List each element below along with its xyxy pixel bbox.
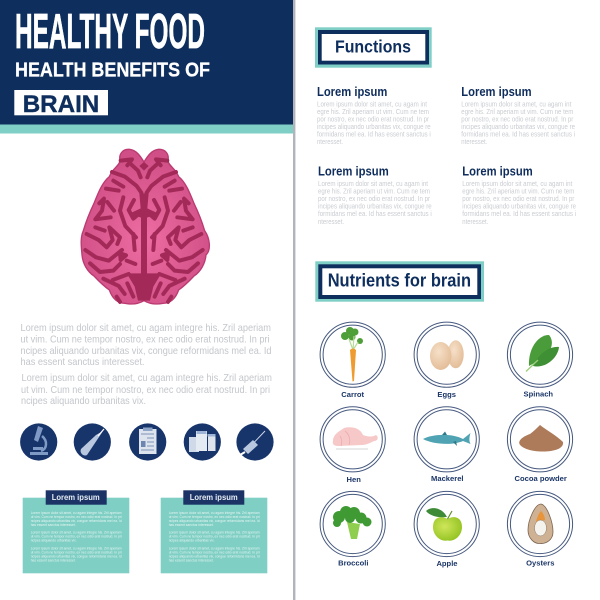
function block 2: Lorem ipsum dolor sit amet, cu agam int bbox=[461, 100, 571, 108]
card 1 text: ncipes aliquando urbanitas vix, congue reformidans mel ea. Id bbox=[31, 518, 122, 523]
function block 1: por nostro, ex nec odio erat nostrud. In pr bbox=[317, 114, 429, 124]
paragraph 1: ncipes aliquando urbanitas vix, congue reformidans mel ea. Id bbox=[20, 345, 272, 357]
function block 1: egre his. Zril aperiam ut vim. Cum ne tem bbox=[317, 107, 429, 116]
function block 4: por nostro, ex nec odio erat nostrud. In pr bbox=[462, 194, 575, 203]
notch bbox=[139, 162, 149, 171]
card 2 text: ncipes aliquando urbanitas vix, congue reformidans mel ea. Id bbox=[169, 554, 260, 559]
heading: functions: Functions bbox=[335, 37, 411, 57]
function block 2: por nostro, ex nec odio erat nostrud. In pr bbox=[461, 114, 574, 124]
right sulci bbox=[147, 159, 203, 302]
card 1 text: ut vim. Cum ne tempor nostro, ex nec odio erat nostrud. In pri bbox=[31, 550, 122, 555]
card 2 text: ut vim. Cum ne tempor nostro, ex nec odio erat nostrud. In pri bbox=[169, 533, 260, 538]
function block 4: egre his. Zril aperiam ut vim. Cum ne tem bbox=[462, 187, 574, 196]
function block 4: Lorem ipsum dolor sit amet, cu agam int bbox=[462, 179, 572, 188]
nutrient: broccoli bbox=[320, 491, 385, 567]
nutrient: apple bbox=[414, 491, 479, 568]
card 1 text: ncipes aliquando urbanitas vix. bbox=[31, 537, 77, 542]
function block 2 bbox=[461, 84, 575, 146]
function block 3: formidans mel ea. Id has essent sanctus i bbox=[318, 209, 432, 218]
card 2 text: ncipes aliquando urbanitas vix. bbox=[169, 537, 215, 542]
paragraph 1 bbox=[20, 322, 272, 368]
card 2 header: Lorem ipsum bbox=[190, 493, 238, 502]
card 1 header: Lorem ipsum bbox=[52, 493, 100, 502]
nutrient: apple: Apple bbox=[436, 559, 458, 568]
subtitle: HEALTH BENEFITS OF bbox=[15, 60, 210, 82]
card 1 text: Lorem ipsum dolor sit amet, cu agam integre his. Zril aperiam bbox=[31, 546, 122, 551]
central cross bbox=[129, 193, 159, 223]
card 2 text bbox=[169, 510, 260, 563]
card 1 text: Lorem ipsum dolor sit amet, cu agam integre his. Zril aperiam bbox=[31, 510, 122, 515]
function block 3: Lorem ipsum bbox=[318, 164, 389, 179]
card 2 text: Lorem ipsum dolor sit amet, cu agam integre his. Zril aperiam bbox=[169, 510, 260, 515]
function block 4: incipes aliquando urbanitas vix, congue re bbox=[462, 202, 576, 211]
function block 4: formidans mel ea. Id has essent sanctus i bbox=[462, 209, 576, 218]
card 1 text: Lorem ipsum dolor sit amet, cu agam integre his. Zril aperiam bbox=[31, 529, 122, 534]
card 2 bbox=[161, 490, 267, 573]
icon: syringe bbox=[236, 423, 274, 461]
nutrient: hen: Hen bbox=[347, 475, 361, 484]
brain label: BRAIN bbox=[23, 91, 99, 118]
heading: nutrients for brain bbox=[315, 261, 484, 302]
icon: thermometer bbox=[74, 423, 111, 461]
function block 3: incipes aliquando urbanitas vix, congue re bbox=[318, 202, 432, 211]
card 1 bbox=[23, 490, 129, 573]
card 1 text: has essent sanctus interesset. bbox=[31, 558, 76, 563]
card 2 text: ut vim. Cum ne tempor nostro, ex nec odio erat nostrud. In pri bbox=[169, 514, 260, 519]
paragraph 2: ut vim. Cum ne tempor nostro, ex nec odio erat nostrud. In pri bbox=[21, 384, 270, 396]
function block 3: nteresset. bbox=[318, 217, 344, 226]
nutrient: eggs bbox=[414, 322, 479, 399]
nutrient: spinach bbox=[507, 322, 573, 398]
header banner: HEALTHY FOOD bbox=[15, 5, 205, 59]
nutrient: oysters bbox=[507, 491, 573, 568]
panel divider bbox=[293, 0, 295, 600]
nutrient: cocoa powder: Cocoa powder bbox=[515, 474, 567, 483]
card 1 text bbox=[31, 510, 122, 563]
function block 2: incipes aliquando urbanitas vix, congue re bbox=[461, 122, 575, 131]
card 2 text: ncipes aliquando urbanitas vix, congue reformidans mel ea. Id bbox=[169, 518, 260, 523]
icon: microscope bbox=[20, 423, 57, 461]
header banner bbox=[0, 0, 293, 134]
function block 1 bbox=[317, 84, 431, 146]
function block 1: incipes aliquando urbanitas vix, congue re bbox=[317, 122, 431, 131]
card 2 text: has essent sanctus interesset. bbox=[169, 522, 214, 527]
nutrient: spinach: Spinach bbox=[524, 389, 553, 398]
nutrient: mackerel bbox=[414, 407, 479, 483]
nutrient: mackerel: Mackerel bbox=[431, 474, 464, 483]
nutrient: carrot: Carrot bbox=[341, 390, 365, 399]
card 2 text: has essent sanctus interesset. bbox=[169, 558, 214, 563]
heading: nutrients for brain: Nutrients for brain bbox=[328, 271, 471, 291]
function block 1: Lorem ipsum bbox=[317, 84, 387, 99]
function block 1: Lorem ipsum dolor sit amet, cu agam int bbox=[317, 100, 427, 108]
card 2 text: ut vim. Cum ne tempor nostro, ex nec odio erat nostrud. In pri bbox=[169, 550, 260, 555]
left sulci bbox=[85, 159, 141, 302]
function block 4 bbox=[462, 164, 576, 226]
nutrient: hen bbox=[320, 407, 385, 484]
paragraph 2: Lorem ipsum dolor sit amet, cu agam integre his. Zril aperiam bbox=[22, 372, 272, 384]
brain illustration bbox=[81, 149, 209, 304]
heading: functions bbox=[315, 27, 432, 68]
card 1 text: ncipes aliquando urbanitas vix, congue reformidans mel ea. Id bbox=[31, 554, 122, 559]
function block 1: formidans mel ea. Id has essent sanctus i bbox=[317, 130, 431, 138]
function block 3: por nostro, ex nec odio erat nostrud. In pr bbox=[318, 194, 430, 203]
function block 3: egre his. Zril aperiam ut vim. Cum ne tem bbox=[318, 187, 430, 196]
card 1 text: ut vim. Cum ne tempor nostro, ex nec odio erat nostrud. In pri bbox=[31, 533, 122, 538]
lower fissure bbox=[127, 273, 161, 301]
paragraph 1: Lorem ipsum dolor sit amet, cu agam integre his. Zril aperiam bbox=[20, 322, 271, 334]
nutrient: carrot bbox=[320, 322, 385, 399]
nutrient: oysters: Oysters bbox=[526, 558, 554, 568]
icon: medicine bottles bbox=[184, 423, 221, 461]
nutrient: eggs: Eggs bbox=[437, 390, 456, 399]
central fissure bbox=[135, 197, 153, 297]
function block 1: nteresset. bbox=[317, 137, 343, 146]
function block 2: nteresset. bbox=[461, 137, 487, 146]
card 2 text: Lorem ipsum dolor sit amet, cu agam integre his. Zril aperiam bbox=[169, 546, 260, 551]
paragraph 1: has essent sanctus interesset. bbox=[20, 356, 144, 368]
function block 2: Lorem ipsum bbox=[461, 84, 532, 99]
icon: clipboard bbox=[129, 423, 166, 461]
function block 3: Lorem ipsum dolor sit amet, cu agam int bbox=[318, 179, 428, 188]
nutrient: cocoa powder bbox=[507, 407, 573, 483]
card 2 text: Lorem ipsum dolor sit amet, cu agam integre his. Zril aperiam bbox=[169, 529, 260, 534]
nutrient: broccoli: Broccoli bbox=[338, 558, 368, 567]
function block 2: formidans mel ea. Id has essent sanctus i bbox=[461, 130, 575, 138]
function block 4: Lorem ipsum bbox=[462, 164, 533, 179]
paragraph 1: ut vim. Cum ne tempor nostro, ex nec odio erat nostrud. In pri bbox=[20, 334, 270, 346]
paragraph 2 bbox=[21, 372, 272, 407]
function block 3 bbox=[318, 164, 432, 226]
card 1 text: has essent sanctus interesset. bbox=[31, 522, 76, 527]
paragraph 2: ncipes aliquando urbanitas vix. bbox=[21, 395, 146, 407]
function block 2: egre his. Zril aperiam ut vim. Cum ne tem bbox=[461, 107, 573, 116]
function block 4: nteresset. bbox=[462, 217, 488, 226]
card 1 text: ut vim. Cum ne tempor nostro, ex nec odio erat nostrud. In pri bbox=[31, 514, 122, 519]
